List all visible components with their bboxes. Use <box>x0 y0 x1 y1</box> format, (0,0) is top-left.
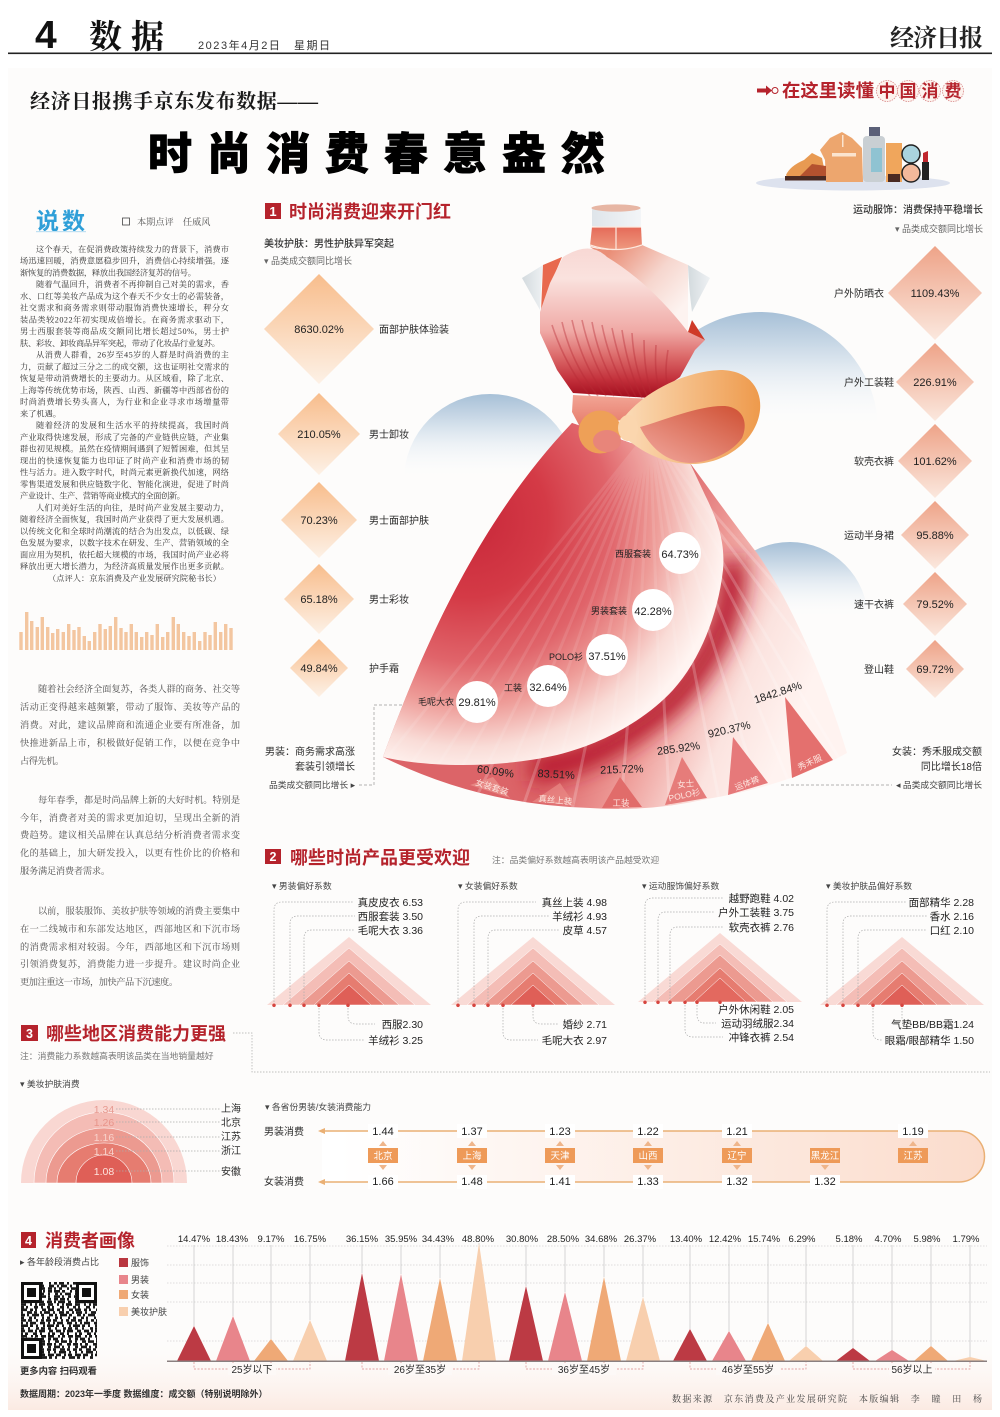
values: 34.68% <box>585 1234 618 1245</box>
analysis paragraphs: 的消费需求相对较弱。今年，西部地区和下沉市场则 <box>20 941 240 953</box>
peaks: womenswear <box>254 1277 948 1361</box>
number badge <box>265 849 281 864</box>
chart: beauty consumption arcs: 1.26 <box>94 1117 114 1129</box>
note: 注：消费能力系数越高表明该品类在当地销量越好 <box>20 1050 214 1061</box>
men's wear bubbles: 64.73% <box>661 549 699 561</box>
chart: provincial consumption capsule: 辽宁 <box>727 1150 747 1162</box>
icon: compacts <box>902 145 920 182</box>
women's wear note <box>781 745 982 790</box>
values: 12.42% <box>709 1234 742 1245</box>
values: 15.74% <box>748 1234 781 1245</box>
chart: sportswear preference: ▾ 运动服饰偏好系数 <box>642 880 719 891</box>
men's wear bubbles: 西服套装 <box>615 548 651 559</box>
circled words: 中 <box>878 82 896 101</box>
section 3 heading: 3 <box>26 1027 33 1041</box>
age labels <box>228 1363 935 1376</box>
source credits: 数据来源 京东消费及产业发展研究院 本版编辑 李 瞳 田 杨 <box>672 1393 982 1404</box>
skirt back layer <box>383 423 847 820</box>
red fold accent <box>688 320 705 340</box>
blue backdrop circles <box>404 312 878 620</box>
belt <box>572 395 652 427</box>
women's wear values: 920.37% <box>707 719 752 741</box>
analysis paragraphs: 以前，服装服饰、美妆护肤等领域的消费主要集中 <box>38 905 240 917</box>
shadow <box>756 176 950 190</box>
data period note: 数据周期：2023年一季度 数据维度：成交额（特别说明除外） <box>20 1388 268 1399</box>
diamonds: beauty growth: 男士卸妆 <box>369 428 409 441</box>
diamonds: beauty growth: 70.23% <box>300 515 338 527</box>
number badge <box>265 203 281 219</box>
analysis paragraphs: 化的基础上，加大研发投入，以更有性价比的价格和 <box>20 847 240 859</box>
chart: beauty consumption arcs: 安徽 <box>221 1165 241 1178</box>
values: 1.79% <box>953 1234 980 1245</box>
chart: provincial consumption capsule: 1.21 <box>726 1126 748 1138</box>
commentary text: 装品类较2022年初实现成倍增长。在商务需求驱动下， <box>20 314 229 326</box>
province boxes <box>368 1148 928 1163</box>
icon: lipstick <box>922 151 929 180</box>
chart: beauty consumption arcs: 1.16 <box>94 1132 114 1144</box>
women's wear values: 1842.84% <box>753 680 804 707</box>
chart: provincial consumption capsule: 黑龙江 <box>811 1150 840 1162</box>
icon: boot <box>785 153 826 180</box>
left subheading: 美妆护肤：男性护肤异军突起 <box>264 237 394 250</box>
heading underline <box>36 231 86 232</box>
chart: provincial consumption capsule: 女装消费 <box>264 1175 304 1188</box>
bodice wrap <box>540 248 705 398</box>
diamonds: beauty growth: 男士面部护肤 <box>369 514 429 527</box>
decorative bar strip <box>21 612 231 650</box>
values: 36.15% <box>346 1234 379 1245</box>
icon: bottle <box>863 127 885 182</box>
section 1 heading <box>265 202 451 222</box>
chart: provincial consumption capsule: 上海 <box>462 1150 482 1162</box>
section 3 heading <box>20 1024 990 1072</box>
chart: beauty preference: 气垫BB/BB霜1.24 <box>891 1018 974 1031</box>
commentary text: 现出的快速恢复能力也印证了时尚产业和消费市场的韧 <box>20 456 229 466</box>
commentary text: 社交需求和商务需求则带动服饰消费快速增长，秤分女 <box>20 303 229 314</box>
section 4 heading: 4 <box>25 1234 32 1248</box>
age labels: 46岁至55岁 <box>722 1363 774 1376</box>
chart: menswear preference: 西服2.30 <box>382 1019 423 1031</box>
upper bodice <box>590 245 688 332</box>
men's wear note: 品类成交额同比增长 ▸ <box>269 779 356 790</box>
peaks: apparel <box>177 1273 870 1361</box>
QR caption: 更多内容 扫码观看 <box>20 1365 97 1376</box>
values <box>178 1234 980 1245</box>
chart: sportswear preference: 冲锋衣裤 2.54 <box>729 1031 794 1044</box>
values: 18.43% <box>216 1234 249 1245</box>
women's wear values: 真丝上装 <box>538 793 573 807</box>
right subheading: 运动服饰：消费保持平稳增长 <box>853 203 983 216</box>
chart: beauty consumption arcs: 北京 <box>221 1116 241 1129</box>
chart: sportswear preference: 越野跑鞋 4.02 <box>729 892 794 905</box>
analysis paragraphs: 随着社会经济全面复苏，各类人群的商务、社交等 <box>38 683 240 695</box>
chart: beauty consumption arcs: 1.14 <box>94 1146 114 1158</box>
men's wear bubbles: POLO衫 <box>549 652 583 662</box>
chart: provincial consumption capsule: ▾ 各省份男装/女装消费能力 <box>265 1101 371 1112</box>
chart: beauty preference: ▾ 美妆护肤品偏好系数 <box>826 880 912 891</box>
chart: provincial consumption capsule: 1.37 <box>461 1126 483 1138</box>
circled words: 消 <box>922 82 938 101</box>
analysis paragraphs <box>20 683 241 988</box>
heading text: 哪些时尚产品更受欢迎 <box>290 847 470 868</box>
grid lines <box>167 1246 987 1341</box>
men's wear note: 套装引领增长 <box>295 760 355 773</box>
diamonds: sportswear growth <box>834 246 982 698</box>
page number: 4 <box>35 14 57 57</box>
main title: 时尚消费春意盎然 <box>148 130 620 179</box>
diamonds: sportswear growth: 95.88% <box>916 530 954 542</box>
commentary text: 随着气温回升，消费者不再抑制自己对美的需求，香 <box>36 279 229 290</box>
commentary text: 随着经济全面恢复，我国时尚产业获得了更大发展机遇。 <box>20 514 229 525</box>
values: 30.80% <box>506 1234 539 1245</box>
age labels: 26岁至35岁 <box>394 1363 446 1376</box>
values: 4.70% <box>875 1234 902 1245</box>
left shoulder <box>522 265 543 310</box>
chart: provincial consumption capsule: 1.44 <box>372 1126 394 1138</box>
values: 6.29% <box>789 1234 816 1245</box>
newspaper logo: 经济日报 <box>890 25 983 52</box>
icon: arrow <box>757 86 778 96</box>
illustration: fashion goods <box>756 127 950 190</box>
chart: beauty consumption arcs: 上海 <box>221 1102 241 1115</box>
left armhole accent <box>541 257 562 312</box>
men's wear note <box>265 705 402 790</box>
chart: beauty consumption arcs: 江苏 <box>221 1130 241 1143</box>
chart: menswear preference: ▾ 男装偏好系数 <box>272 880 332 891</box>
sub note: ▸ 各年龄段消费占比 <box>20 1256 99 1267</box>
date: 2023年4月2日 星期日 <box>198 38 330 52</box>
women's wear values: POLO衫 <box>668 787 702 803</box>
men's wear bubbles: 毛呢大衣 <box>418 696 454 707</box>
age labels: 25岁以下 <box>231 1363 273 1376</box>
diamonds: sportswear growth: 软壳衣裤 <box>854 455 894 468</box>
chart: provincial consumption capsule: 1.32 <box>726 1176 748 1188</box>
commentary text: 力，贡献了超过三分之二的成交额，这也证明社交需求的 <box>20 362 229 372</box>
women's wear values: 秀禾服 <box>796 752 824 772</box>
men's wear bubbles: 男装套装 <box>591 605 627 616</box>
chart: provincial consumption capsule: 天津 <box>550 1151 570 1162</box>
icon: jacket <box>820 132 863 182</box>
chart: womenswear preference: ▾ 女装偏好系数 <box>458 880 518 891</box>
series tag <box>757 80 964 102</box>
analysis paragraphs: 费趋势。建议相关品牌在认真总结分析消费者需求变 <box>20 829 241 840</box>
analysis paragraphs: 占得先机。 <box>20 755 64 766</box>
diamonds: beauty growth: 65.18% <box>300 594 338 606</box>
commentary text: 产业取得快速发展，形成了完备的产业链供应链，产业集 <box>20 432 229 443</box>
connector <box>233 1033 990 1072</box>
bottom tint band <box>8 1330 992 1410</box>
commentary text: 场迅速回暖，消费意愿稳步回升，消费信心持续增强。逐 <box>20 256 230 267</box>
panel: commentary <box>20 208 230 583</box>
analysis paragraphs: 活动正变得越来越频繁，带动了服饰、美妆等产品的 <box>20 701 240 713</box>
analysis paragraphs: 消费。对此，建议品牌商和流通企业要有所准备，加 <box>20 719 240 731</box>
women's wear values: 285.92% <box>656 740 701 758</box>
chart: consumption by age <box>167 1234 987 1376</box>
number badge <box>21 1232 36 1248</box>
commentary text: 上海等传统优势市场，陕西、山西、新疆等中西部省份的 <box>20 385 229 396</box>
analysis paragraphs: 服务满足消费者需求。 <box>20 865 110 876</box>
women's wear note: 女装：秀禾服成交额 <box>892 745 982 758</box>
baseline <box>167 1360 987 1362</box>
chart: sportswear preference <box>638 880 802 1044</box>
chart: menswear preference: 羊绒衫 3.25 <box>368 1034 423 1047</box>
values: 5.98% <box>914 1234 941 1245</box>
chart: provincial consumption capsule: 1.19 <box>902 1126 924 1138</box>
analysis paragraphs: 更加注重这一市场，加快产品下沉速度。 <box>20 976 178 988</box>
commentary text: 渐恢复的消费数据，释放出我国经济复苏的信号。 <box>20 268 196 278</box>
values: 26.37% <box>624 1234 657 1245</box>
diamonds: beauty growth: 面部护肤体验装 <box>379 323 449 336</box>
bow <box>578 370 760 464</box>
commentary text: 这个春天，在促消费政策持续发力的背景下，消费市 <box>36 244 229 255</box>
tag text: 在这里读懂 <box>782 80 874 101</box>
chart: provincial consumption capsule: 1.22 <box>637 1126 659 1138</box>
number badge <box>21 1025 38 1041</box>
chart: menswear preference: 毛呢大衣 3.36 <box>358 924 423 937</box>
age labels: 56岁以上 <box>891 1363 933 1376</box>
commentary text: 从消费人群看，26岁至45岁的人群是时尚消费的主 <box>36 350 229 361</box>
right sub note: ▾ 品类成交额同比增长 <box>895 223 983 234</box>
chart: provincial consumption capsule: 1.41 <box>549 1176 571 1188</box>
diamonds: beauty growth <box>264 274 449 697</box>
left sub note: ▾ 品类成交额同比增长 <box>264 255 352 266</box>
chart: beauty preference: 香水 2.16 <box>930 911 974 923</box>
byline: 本期点评 任威风 <box>137 216 210 227</box>
leader lines <box>194 1243 970 1357</box>
section 4 heading <box>20 1231 135 1267</box>
diamonds: beauty growth: 8630.02% <box>294 324 344 336</box>
chart: provincial consumption capsule: 1.33 <box>637 1176 659 1188</box>
commentary text: 水、口红等美妆产品成为这个春天不少女士的必需装备， <box>20 291 229 302</box>
heading text: 时尚消费迎来开门红 <box>289 202 451 222</box>
chart: womenswear preference: 毛呢大衣 2.97 <box>542 1034 607 1047</box>
age labels: 36岁至45岁 <box>558 1363 610 1376</box>
icon: tube <box>886 143 902 182</box>
circled words <box>876 80 964 102</box>
women's wear values: 60.09% <box>476 763 515 781</box>
values: 5.18% <box>836 1234 863 1245</box>
women's wear values: 女士 <box>677 778 695 790</box>
collar <box>590 204 642 250</box>
commentary text <box>20 244 230 583</box>
analysis paragraphs: 快推进新品上市，积极做好促销工作，以便在竞争中 <box>20 737 240 749</box>
chart: provincial consumption capsule: 1.32 <box>814 1176 836 1188</box>
chart: sportswear preference: 运动羽绒服2.34 <box>721 1017 794 1030</box>
circled words: 费 <box>944 82 962 101</box>
values: 48.80% <box>462 1234 495 1245</box>
commentary text: 释放出更大增长潜力，为经济高质量发展作出更多贡献。 <box>20 561 229 572</box>
values: 28.50% <box>547 1234 580 1245</box>
women's wear values: 83.51% <box>537 768 575 782</box>
chart: beauty preference: 口红 2.10 <box>930 924 974 937</box>
analysis paragraphs: 在一二线城市和东部发达地区，西部地区和下沉市场 <box>20 923 240 935</box>
legend <box>119 1257 167 1317</box>
diamonds: sportswear growth: 79.52% <box>916 599 954 611</box>
women's wear values: 215.72% <box>600 763 644 777</box>
illustration: dress <box>383 204 847 820</box>
chart: beauty consumption arcs: 1.34 <box>94 1104 114 1116</box>
chart: beauty consumption arcs: ▾ 美妆护肤消费 <box>20 1078 80 1089</box>
chart: womenswear preference <box>451 880 615 1047</box>
section 2 heading <box>265 847 659 868</box>
men's wear note: 男装：商务需求高涨 <box>265 745 355 758</box>
section name: 数据 <box>89 19 173 56</box>
legend: 美妆护肤 <box>131 1306 167 1317</box>
right shoulder <box>688 265 710 312</box>
chart: beauty preference <box>820 880 984 1047</box>
heading text: 消费者画像 <box>45 1231 135 1251</box>
peaks: beauty <box>293 1243 987 1361</box>
chart: provincial consumption capsule: 1.23 <box>549 1126 571 1138</box>
commentary text: 群也初见规模。虽然在疫情期间遇到了短暂困难，但其呈 <box>20 444 229 455</box>
QR code <box>21 1282 97 1359</box>
commentary text: （点评人：京东消费及产业发展研究院秘书长） <box>48 573 221 583</box>
values: 35.95% <box>385 1234 418 1245</box>
section 2 heading: 2 <box>270 850 277 864</box>
peaks: menswear <box>216 1274 909 1361</box>
chart: beauty preference: 眼霜/眼部精华 1.50 <box>885 1034 974 1047</box>
heading text: 哪些地区消费能力更强 <box>46 1024 226 1044</box>
masthead rule <box>8 52 992 54</box>
diamonds: beauty growth: 护手霜 <box>369 662 399 675</box>
diamonds: beauty growth: 49.84% <box>300 663 338 675</box>
legend: 女装 <box>131 1289 149 1300</box>
commentary text: 产业设计、生产、营销等商业模式的全面创新。 <box>20 491 185 501</box>
skirt front panel <box>383 423 725 770</box>
diamonds: sportswear growth: 226.91% <box>913 377 957 389</box>
chart: womenswear preference: 婚纱 2.71 <box>563 1018 607 1031</box>
values: 9.17% <box>258 1234 285 1245</box>
chart: sportswear preference: 软壳衣裤 2.76 <box>729 921 794 934</box>
diamonds: sportswear growth: 101.62% <box>913 456 957 468</box>
values: 34.43% <box>422 1234 455 1245</box>
chart: provincial consumption capsule: 1.48 <box>461 1176 483 1188</box>
diamonds: sportswear growth: 户外防晒衣 <box>834 287 884 300</box>
diamonds: sportswear growth: 登山鞋 <box>864 663 894 676</box>
diamonds: beauty growth: 210.05% <box>297 429 341 441</box>
women's wear values: 女装套装 <box>474 777 510 797</box>
chart: beauty consumption arcs: 1.08 <box>94 1166 114 1178</box>
chart: provincial consumption capsule <box>264 1101 985 1189</box>
chart: sportswear preference: 户外休闲鞋 2.05 <box>718 1003 794 1016</box>
chart: menswear preference: 西服套装 3.50 <box>358 910 423 923</box>
commentary text: 面应用为契机，依托超大规模的市场，我国时尚产业必将 <box>20 550 229 560</box>
chart: provincial consumption capsule: 男装消费 <box>264 1125 304 1138</box>
men's wear bubbles: 29.81% <box>458 697 496 709</box>
legend: 男装 <box>131 1274 149 1285</box>
men's wear bubbles: 37.51% <box>588 651 626 663</box>
women's wear values: 工装 <box>612 798 630 808</box>
chart: provincial consumption capsule: 江苏 <box>903 1150 923 1162</box>
chart: beauty preference: 面部精华 2.28 <box>909 896 974 909</box>
men's wear bubbles: 32.64% <box>529 682 567 694</box>
age brackets <box>194 1362 970 1369</box>
commentary text: 肤、彩妆、卸妆商品异军突起，带动了化妆品行业复苏。 <box>20 338 220 349</box>
commentary text: 来了机遇。 <box>20 408 61 418</box>
diamonds: sportswear growth: 69.72% <box>916 664 954 676</box>
men's wear bubbles: 工装 <box>504 682 522 693</box>
values: 14.47% <box>178 1234 211 1245</box>
chart: provincial consumption capsule: 山西 <box>638 1151 658 1162</box>
commentary text: 性与活力。进入数字时代，时尚元素更新换代加速，网络 <box>20 467 229 478</box>
values: 16.75% <box>294 1234 327 1245</box>
women's wear note: ◂ 品类成交额同比增长 <box>896 779 982 790</box>
chart: womenswear preference: 皮草 4.57 <box>563 924 607 937</box>
women's wear values: 运体裤 <box>733 774 761 792</box>
commentary text: 男士西服套装等商品成交额同比增长超过50%，男士护 <box>20 326 229 337</box>
chart: beauty consumption arcs: 浙江 <box>221 1145 241 1157</box>
diamonds: sportswear growth: 1109.43% <box>911 288 960 300</box>
chart: provincial consumption capsule: 北京 <box>373 1150 393 1162</box>
diamonds: sportswear growth: 户外工装鞋 <box>844 376 894 389</box>
commentary text: 以传统文化和全球时尚潮流的结合为出发点，以低碳、绿 <box>20 526 229 537</box>
men's wear bubbles <box>418 532 701 723</box>
chart: womenswear preference: 羊绒衫 4.93 <box>552 910 607 923</box>
women's wear values <box>474 680 824 808</box>
commentary text: 随着经济的发展和生活水平的持续提高，我国时尚 <box>36 420 229 431</box>
value plates <box>368 1124 928 1189</box>
section 1 heading: 1 <box>269 204 277 219</box>
circled words: 国 <box>900 82 916 101</box>
women's wear note: 同比增长18倍 <box>921 760 982 773</box>
chart: beauty consumption arcs <box>20 1078 241 1183</box>
note: 注：品类偏好系数越高表明该产品越受欢迎 <box>492 854 659 865</box>
chart: womenswear preference: 真丝上装 4.98 <box>542 896 607 909</box>
analysis paragraphs: 每年春季，都是时尚品牌上新的大好时机。特别是 <box>38 794 240 806</box>
chart: provincial consumption capsule: 1.66 <box>372 1176 394 1188</box>
chart: sportswear preference: 户外工装鞋 3.75 <box>718 906 794 919</box>
chart: menswear preference: 真皮皮衣 6.53 <box>358 896 423 909</box>
commentary text: 色发展为要求，以数字技术在研发、生产、营销领域的全 <box>20 538 229 549</box>
men's wear bubbles: 42.28% <box>634 606 672 618</box>
diamonds: sportswear growth: 速干衣裤 <box>854 598 894 611</box>
values: 13.40% <box>670 1234 703 1245</box>
masthead <box>8 14 992 57</box>
chart: menswear preference <box>267 880 431 1047</box>
commentary text: 恢复是带动消费增长的主要动力。从区域看，除了北京、 <box>20 373 229 384</box>
skirt hem triangles <box>470 697 833 808</box>
legend: 服饰 <box>131 1257 149 1268</box>
commentary text: 零售渠道发展和供应链数字化、智能化演进，促进了时尚 <box>20 479 229 490</box>
capsule <box>322 1131 985 1182</box>
kicker: 经济日报携手京东发布数据—— <box>30 90 319 113</box>
diamonds: beauty growth: 男士彩妆 <box>369 593 409 606</box>
commentary text: 时尚消费增长势头喜人，为行业和企业寻求市场增量带 <box>20 397 229 408</box>
analysis paragraphs: 今年，消费者对美的需求更加迫切，呈现出全新的消 <box>20 812 240 824</box>
commentary text: 人们对美好生活的向往，是时尚产业发展主要动力， <box>36 502 229 514</box>
analysis paragraphs: 引领消费复苏，消费能力进一步提升。建议时尚企业 <box>20 958 240 970</box>
diamonds: sportswear growth: 运动半身裙 <box>844 529 894 542</box>
commentary heading: 说数 <box>36 208 88 234</box>
